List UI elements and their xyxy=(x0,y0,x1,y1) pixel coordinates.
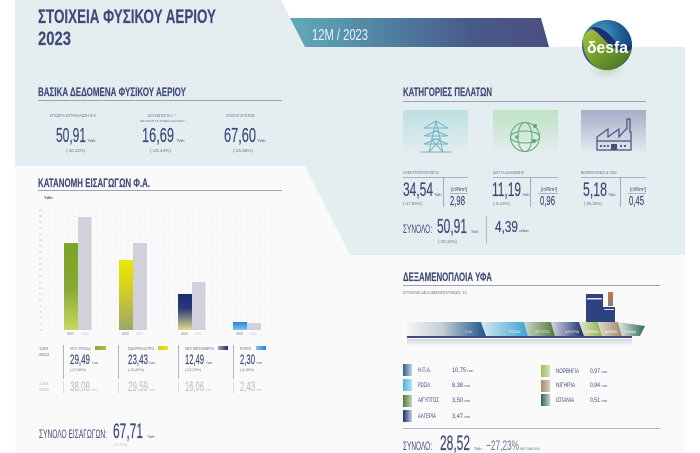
icon: LNG tanker ship: ΡΩΣΙΑ xyxy=(509,329,520,334)
entry: Kipoi: (-5,35%) xyxy=(240,367,255,372)
stat: distribution networks: (-6,13%) xyxy=(493,201,510,206)
entry: Sidirokastro xyxy=(118,345,168,394)
stat: industrial and CNG: ΒΙΟΜΗΧΑΝΙΕΣ & CNG xyxy=(581,170,617,175)
entry: Agia Triada: ΑΓΙΑ ΤΡΙΑΔΑ xyxy=(70,346,91,351)
text: total tankers: ΣΥΝΟΛΟ ΔΕΞΑΜΕΝΟΠΛΟΙΩΝ: 41 xyxy=(403,290,467,295)
entry: Agia Triada: TWh xyxy=(92,361,99,365)
bar chart: imports by entry point: 12 xyxy=(39,293,42,296)
bar chart: imports by entry point: 40 xyxy=(39,209,42,212)
entry: Sidirokastro: TWh xyxy=(149,361,156,365)
table: imports by entry point xyxy=(39,345,266,394)
heading: LNG tankers: ΔΕΞΑΜΕΝΟΠΛΟΙΑ ΥΦΑ xyxy=(403,272,492,284)
bar chart: imports by entry point: 20 xyxy=(39,269,42,272)
stat: exports: ΕΞΑΓΩΓΕΣ Φ.Α. * xyxy=(148,113,176,118)
bar chart: imports by entry point: 32 xyxy=(39,233,42,236)
bar chart: imports by entry point: 0 xyxy=(40,329,42,332)
legend item: USA: Η.Π.Α. xyxy=(418,368,431,374)
icon: LNG tanker ship: ΙΣΠΑΝΙΑ xyxy=(624,329,636,334)
stat: domestic consumption xyxy=(50,113,97,153)
stat: industrial and CNG: [ct/Nm³] xyxy=(630,187,647,193)
heading: basic data: ΒΑΣΙΚΑ ΔΕΔΟΜΕΝΑ ΦΥΣΙΚΟΥ ΑΕΡΙΟΥ xyxy=(38,87,186,99)
icon: globe network tile xyxy=(493,110,558,154)
legend item: Nigeria: 0,94 xyxy=(590,383,601,389)
stat: distribution networks: [ct/Nm³] xyxy=(541,187,558,193)
stat: total LNG xyxy=(403,432,540,453)
stat: customer total: (-10,13%) xyxy=(438,239,457,244)
stat: exports: ΜΕ ΒΑΣΗ ΤΑ ΣΗΜΕΙΑ ΕΞΟΔΟΥ xyxy=(140,120,185,123)
legend item: Norway: TWh xyxy=(601,370,608,374)
legend item: Russia: TWh xyxy=(464,384,471,388)
stat: power generation: [ct/Nm³] xyxy=(451,187,468,193)
stat: distribution networks: TWh xyxy=(522,193,529,197)
heading: customer categories: ΚΑΤΗΓΟΡΙΕΣ ΠΕΛΑΤΩΝ xyxy=(403,87,492,99)
icon: desfa logo: δesfa xyxy=(587,38,628,57)
entry: Sidirokastro: (-20,82%) xyxy=(128,367,145,372)
bar chart: imports by entry point: 2023 xyxy=(236,332,243,336)
bar chart: imports by entry point: 2 xyxy=(40,323,42,326)
entry: Nea Mesimvria: TWh xyxy=(206,361,213,365)
bar chart: imports by entry point: 2023 xyxy=(122,332,129,336)
legend item: Norway: 0,97 xyxy=(590,369,601,375)
stat: domestic consumption: TWh xyxy=(87,138,95,143)
legend item: Algeria: ΑΛΓΕΡΙΑ xyxy=(418,414,436,420)
entry: Kipoi xyxy=(233,345,266,394)
entry: Sidirokastro: 29,59 xyxy=(128,379,148,394)
stat: total imports xyxy=(39,420,154,447)
entry: Sidirokastro: ΣΙΔΗΡΟΚΑΣΤΡΟ xyxy=(128,346,154,351)
title: 2023 xyxy=(38,28,71,50)
panel: light blue background xyxy=(15,0,685,255)
legend item: Nigeria xyxy=(541,380,608,392)
icon: LNG tanker ship: ΝΙΓΗΡΙΑ xyxy=(605,329,617,334)
bar chart: imports by entry point: 16 xyxy=(39,281,42,284)
stat: gas off-take: (-21,56%) xyxy=(233,148,253,153)
section: LNG tankers xyxy=(403,272,660,453)
stat: exports: 16,69 xyxy=(142,125,174,147)
stat: industrial and CNG: 5,18 xyxy=(583,180,607,201)
section: import distribution xyxy=(38,178,282,447)
bar chart: imports by entry point: 2022 xyxy=(250,332,257,336)
icon: desfa logo xyxy=(582,20,632,82)
bar chart: imports by entry point: 10 xyxy=(39,299,42,302)
entry: Sidirokastro: TWh xyxy=(149,388,156,392)
bar chart: imports by entry point: 26 xyxy=(39,251,42,254)
stat: exports: (-43,44%) xyxy=(150,148,172,153)
stat: power generation: (-17,89%) xyxy=(403,201,422,206)
stat: industrial and CNG: 0,45 xyxy=(629,193,644,208)
stat: exports xyxy=(140,113,185,153)
bar chart: imports by entry point: 36 xyxy=(39,221,42,224)
legend: LNG by origin xyxy=(403,364,608,422)
bar chart: imports by entry point: 2022 xyxy=(195,332,202,336)
entry: Nea Mesimvria: (-22,23%) xyxy=(185,367,202,372)
stat: total LNG: TWh xyxy=(474,447,481,451)
bar chart: imports by entry point: 34 xyxy=(39,227,42,230)
entry: Agia Triada: (-22,56%) xyxy=(70,367,87,372)
title xyxy=(38,6,216,50)
bar chart: imports by entry point: 38 xyxy=(39,215,42,218)
stat: total imports: 67,71 xyxy=(113,420,143,443)
period banner xyxy=(290,18,549,47)
bar chart: imports by entry point: 22 xyxy=(39,263,42,266)
bar chart: imports by entry point: 30 xyxy=(39,239,42,242)
entry: Nea Mesimvria: ΝΕΑ ΜΕΣΗΜΒΡΙΑ xyxy=(185,346,214,351)
stat: power generation xyxy=(403,170,468,208)
bar chart: imports by entry point: TWh xyxy=(44,195,53,200)
stat: customer total xyxy=(403,216,530,244)
entry: Nea Mesimvria: 12,49 xyxy=(185,352,204,367)
stat: power generation: 34,54 xyxy=(403,180,433,201)
bar chart: imports by entry point xyxy=(39,195,282,336)
icon: LNG tanker ship: Η.Π.Α. xyxy=(465,329,473,334)
title: ΣΤΟΙΧΕΙΑ ΦΥΣΙΚΟΥ ΑΕΡΙΟΥ xyxy=(38,6,216,28)
stat: customer total: TWh xyxy=(471,230,478,234)
stat: total LNG: ΜΕΤΑΒΟΛΗ xyxy=(520,447,540,451)
legend item: Nigeria: TWh xyxy=(601,384,608,388)
icon: LNG tanker ship: ΑΛΓΕΡΙΑ xyxy=(565,329,579,334)
entry: Kipoi: ΚΗΠΟΙ xyxy=(240,346,251,351)
stat: power generation: TWh xyxy=(434,193,441,197)
entry: Agia Triada: 29,49 xyxy=(70,352,90,367)
entry: Agia Triada: TWh xyxy=(91,388,98,392)
entry: Agia Triada: 38,08 xyxy=(70,379,90,394)
legend item: Spain: TWh xyxy=(601,399,608,403)
stat: customer total: ΣΥΝΟΛΟ: xyxy=(403,222,432,236)
table: imports by entry point: 12M xyxy=(39,381,48,386)
stat: total LNG: ΣΥΝΟΛΟ: xyxy=(403,439,432,453)
stat: exports: TWh xyxy=(176,138,184,143)
bar chart: imports by entry point: 18 xyxy=(39,275,42,278)
entry: Sidirokastro: 23,43 xyxy=(128,352,148,367)
stat: domestic consumption: 50,91 xyxy=(56,125,86,147)
stat: total imports: (-22,47%) xyxy=(113,442,128,447)
legend item: Norway: ΝΟΡΒΗΓΙΑ xyxy=(556,369,579,375)
stat: industrial and CNG: TWh xyxy=(608,193,615,197)
stat: gas off-take: ΣΥΝΟΛΟ ΖΗΤΗΣΗΣ xyxy=(226,113,255,118)
table: imports by entry point: 12M xyxy=(39,346,48,351)
stat: customer total: ct/Nm³ xyxy=(519,229,530,233)
legend item: Algeria xyxy=(403,410,471,422)
legend item: Egypt: 3,50 xyxy=(452,398,464,404)
stat: total LNG: −27,23% xyxy=(486,437,519,453)
legend item: Norway xyxy=(541,365,608,377)
stat: distribution networks: ΔΙΚΤΥΑ ΔΙΑΝΟΜΗΣ xyxy=(493,170,524,175)
stat: distribution networks xyxy=(492,170,558,208)
legend item: Spain: 0,51 xyxy=(590,398,601,404)
icon: LNG tanker ship: ΝΟΡΒΗΓΙΑ xyxy=(585,329,599,334)
table: imports by entry point: 2023 xyxy=(39,352,50,357)
stat: gas off-take: TWh xyxy=(257,138,265,143)
section: customer categories xyxy=(403,87,647,244)
stat: gas off-take: 67,60 xyxy=(224,125,256,147)
stat: industrial and CNG xyxy=(581,170,647,208)
icon: power pylon tile xyxy=(403,110,468,154)
stat: domestic consumption: (-10,13%) xyxy=(66,148,85,153)
entry: Nea Mesimvria: 16,06 xyxy=(185,379,204,394)
section: basic natural gas data xyxy=(38,87,282,153)
entry: Kipoi: TWh xyxy=(256,388,263,392)
heading: import distribution: ΚΑΤΑΝΟΜΗ ΕΙΣΑΓΩΓΩΝ Φ.Α. xyxy=(38,178,150,190)
entry: Kipoi: 2,30 xyxy=(240,352,255,367)
legend item: USA: TWh xyxy=(467,369,474,373)
stat: domestic consumption: ΕΓΧΩΡΙΑ ΚΑΤΑΝΑΛΩΣΗ Φ.Α. xyxy=(50,113,97,118)
bar chart: imports by entry point: 24 xyxy=(39,257,42,260)
bar chart: imports by entry point: 6 xyxy=(40,311,42,314)
stat: power generation: ΗΛΕΚΤΡΟΠΑΡΑΓΩΓΟΙ xyxy=(403,170,439,175)
icon: LNG tanker ship xyxy=(407,292,645,346)
entry: Nea Mesimvria xyxy=(178,345,228,394)
entry: Kipoi: TWh xyxy=(256,361,263,365)
stat: customer total: 50,91 xyxy=(437,216,467,238)
bar chart: imports by entry point: 8 xyxy=(40,305,42,308)
stat: distribution networks: 0,96 xyxy=(540,193,555,208)
legend item: USA: 10,75 xyxy=(452,368,467,374)
bar chart: imports by entry point: 2023 xyxy=(181,332,188,336)
bar chart: imports by entry point: 2023 xyxy=(67,332,74,336)
stat: distribution networks: 11,19 xyxy=(492,180,521,201)
table: imports by entry point: 2022 xyxy=(39,387,50,392)
stat: customer total: 4,39 xyxy=(495,219,518,236)
bar chart: imports by entry point: 14 xyxy=(39,287,42,290)
bar chart: imports by entry point: 2022 xyxy=(82,332,89,336)
legend item: Egypt: ΑΙΓΥΠΤΟΣ xyxy=(418,398,439,404)
legend item: Russia xyxy=(403,379,471,391)
legend item: Egypt: TWh xyxy=(464,399,471,403)
legend item: Spain: ΙΣΠΑΝΙΑ xyxy=(556,398,574,404)
legend item: Algeria: 3,47 xyxy=(452,414,464,420)
stat: total imports: ΣΥΝΟΛΟ ΕΙΣΑΓΩΓΩΝ: xyxy=(39,427,107,441)
icon: LNG tanker ship: ΑΙΓΥΠΤΟΣ xyxy=(535,329,550,334)
stat: industrial and CNG: (-36,36%) xyxy=(584,201,602,206)
legend item: Algeria: TWh xyxy=(464,415,471,419)
legend item: Russia: 8,38 xyxy=(452,383,464,389)
stat: gas off-take xyxy=(224,113,265,153)
legend item: Egypt xyxy=(403,395,471,407)
entry: Kipoi: 2,43 xyxy=(240,379,255,394)
legend item: Russia: ΡΩΣΙΑ xyxy=(418,383,430,389)
legend item: USA xyxy=(403,364,474,376)
bar chart: imports by entry point: 4 xyxy=(40,317,42,320)
bar chart: imports by entry point: 2022 xyxy=(136,332,143,336)
icon: factory tile xyxy=(581,110,646,154)
entry: Nea Mesimvria: TWh xyxy=(205,388,212,392)
stat: power generation: 2,98 xyxy=(450,193,465,208)
legend item: Nigeria: ΝΙΓΗΡΙΑ xyxy=(556,383,575,389)
bar chart: imports by entry point: 28 xyxy=(39,245,42,248)
period banner: 12M / 2023 xyxy=(312,27,368,44)
stat: total imports: TWh xyxy=(147,435,154,439)
entry: Agia Triada xyxy=(63,345,106,394)
legend item: Spain xyxy=(541,394,608,406)
